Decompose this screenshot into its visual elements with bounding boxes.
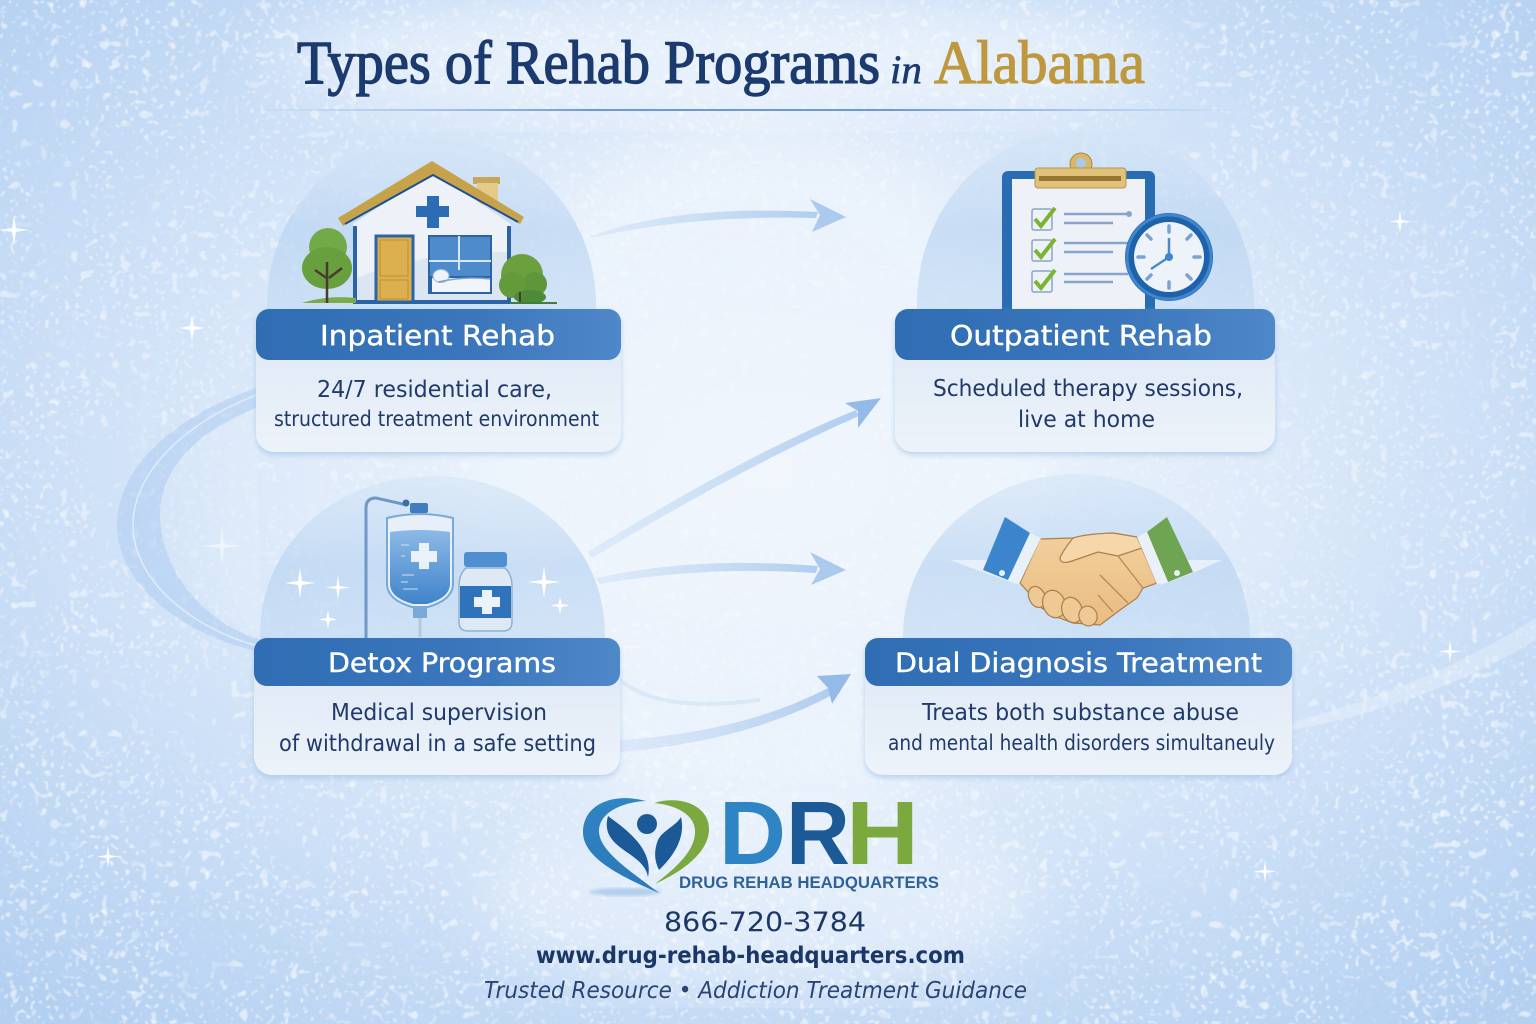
icon: IV bag and medicine bottle <box>366 498 512 638</box>
decorative swirl on the left and wave on the right <box>117 388 1536 730</box>
card: outpatient <box>895 309 1275 452</box>
description: outpatient: live at home <box>1018 407 1155 433</box>
icon: heart with figure <box>583 798 709 896</box>
icon: clipboard and clock <box>1002 153 1213 321</box>
logo: Drug Rehab Headquarters <box>583 784 939 896</box>
panel: dual diagnosis treatment <box>865 474 1292 775</box>
description: inpatient: 24/7 residential care, <box>317 377 552 403</box>
dome: inpatient <box>267 137 596 310</box>
description: outpatient <box>933 376 1243 433</box>
description: inpatient: structured treatment environment <box>274 407 599 431</box>
trees <box>302 228 557 304</box>
card: dual diagnosis <box>865 638 1292 775</box>
description: detox <box>279 700 596 757</box>
icon: handshake <box>950 517 1222 628</box>
card: detox <box>254 638 620 775</box>
title divider rule <box>250 109 1240 111</box>
contact: website: www.drug-rehab-headquarters.com <box>536 943 965 969</box>
description: dual diagnosis: and mental health disorders simultaneuly <box>888 731 1275 755</box>
arrow: inpatient to outpatient <box>590 199 846 238</box>
checklist <box>1032 208 1132 292</box>
dome: detox <box>260 476 605 640</box>
contact: phone number: 866-720-3784 <box>664 907 866 938</box>
panel: outpatient rehab <box>895 130 1275 452</box>
heading bar: inpatient <box>256 309 621 360</box>
arrow: detox card to dual diagnosis <box>620 674 851 752</box>
description: dual diagnosis: Treats both substance abuse <box>921 700 1239 726</box>
dome: dual diagnosis <box>903 474 1250 640</box>
description: detox: of withdrawal in a safe setting <box>279 731 596 757</box>
tagline: Trusted Resource • Addiction Treatment Guidance <box>484 978 1027 1004</box>
heading: dual diagnosis treatment: Dual Diagnosis Treatment <box>895 648 1262 679</box>
heading bar: detox <box>254 638 620 686</box>
dome: outpatient <box>917 130 1254 310</box>
sparkles <box>285 566 570 629</box>
heading bar: outpatient <box>895 309 1275 360</box>
description: detox: Medical supervision <box>331 700 547 726</box>
title: Types of Rehab Programs <box>297 30 880 97</box>
wordmark subtitle: DRUG REHAB HEADQUARTERS <box>679 873 939 892</box>
card: inpatient <box>256 309 621 452</box>
heading: inpatient rehab: Inpatient Rehab <box>320 319 555 352</box>
wordmark: DRH: R <box>786 784 850 884</box>
panel: detox programs <box>254 476 620 775</box>
title: Alabama <box>934 30 1145 97</box>
title: in <box>890 47 922 92</box>
arrow: detox to dual diagnosis <box>596 552 846 585</box>
wordmark: DRH: H <box>846 784 919 884</box>
icon: house with medical cross <box>302 161 557 304</box>
description: inpatient <box>274 377 599 431</box>
heading: detox programs: Detox Programs <box>328 648 556 679</box>
clock <box>1125 213 1213 301</box>
description: outpatient: Scheduled therapy sessions, <box>933 376 1243 402</box>
heading bar: dual diagnosis <box>865 638 1292 686</box>
panel: inpatient rehab <box>256 137 621 452</box>
wordmark: DRH <box>719 784 919 884</box>
wordmark: DRH: D <box>719 784 786 884</box>
arrow: detox to outpatient <box>588 398 881 558</box>
description: dual diagnosis <box>888 700 1275 755</box>
heading: outpatient rehab: Outpatient Rehab <box>950 319 1212 352</box>
